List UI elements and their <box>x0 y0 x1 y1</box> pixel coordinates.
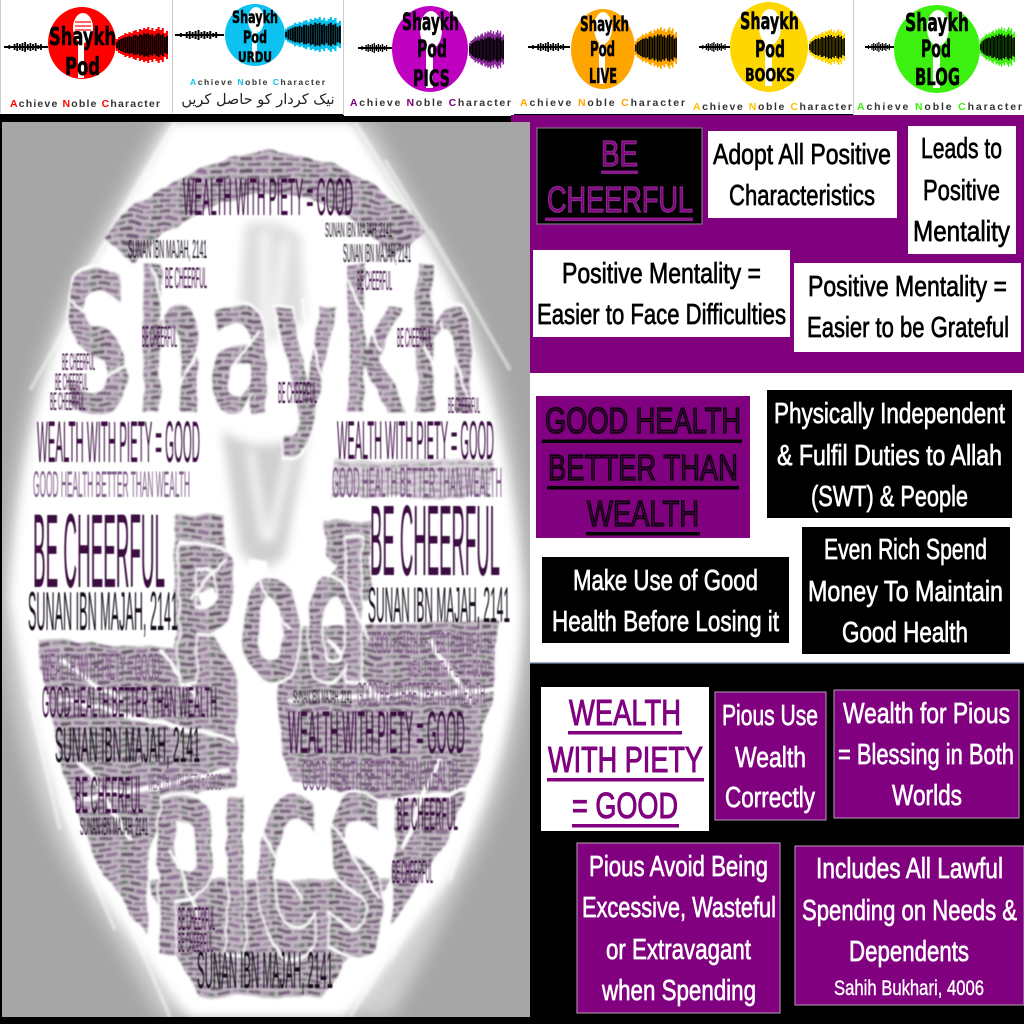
word cloud phrases: GOOD HEALTH BETTER THAN WEALTH <box>42 678 217 727</box>
word cloud phrases: BE CHEERFUL <box>165 262 207 295</box>
word cloud picture panel <box>0 122 530 1017</box>
word cloud phrases: BE CHEERFUL <box>178 927 213 958</box>
text: GOOD HEALTH BETTER THAN WEALTH <box>372 627 492 660</box>
logo: Shaykh Pod Blog <box>857 5 1022 113</box>
word cloud phrases: WEALTH WITH PIETY = GOOD <box>148 769 222 795</box>
panel: be cheerful <box>511 115 1024 373</box>
logo: Shaykh Pod Urdu: Achieve Noble Character <box>190 77 326 87</box>
logo: Shaykh Pod Live: LIVE <box>589 64 617 88</box>
word cloud phrases <box>28 168 510 1000</box>
box: make use of good health: Health Before Losing it <box>552 606 779 638</box>
box: even rich spend money <box>802 527 1010 654</box>
box: pious avoid being excessive: Excessive, Wasteful <box>582 892 776 924</box>
heading: wealth with piety = good: WEALTH <box>569 692 681 733</box>
citation: Sahih Bukhari, 4006 <box>834 977 984 1000</box>
logo: Shaykh Pod Blog: Shaykh <box>905 8 969 37</box>
logo: Shaykh Pod Books: Shaykh <box>740 9 799 35</box>
heading: be cheerful <box>537 128 702 224</box>
box: includes all lawful spending <box>795 846 1024 1005</box>
word cloud phrases: BE CHEERFUL <box>55 369 88 396</box>
logo: Shaykh Pod Books: BOOKS <box>745 65 795 86</box>
box: pious use wealth correctly: Correctly <box>725 782 815 814</box>
word cloud phrases: SUNAN IBN MAJAH, 2141 <box>343 238 411 268</box>
text: WEALTH WITH PIETY = GOOD <box>408 656 490 683</box>
word cloud phrases: BE CHEERFUL <box>278 375 317 410</box>
box: adopt all positive characteristics <box>708 131 897 218</box>
logo: Shaykh Pod Urdu: نیک کردار کو حاصل کریں <box>181 92 335 108</box>
logo lettering: Shaykh Pod Pics mosaic: Pod <box>170 506 370 727</box>
word cloud phrases: WEALTH WITH PIETY = GOOD <box>42 647 160 689</box>
text: WEALTH WITH PIETY = GOOD <box>183 168 353 227</box>
logo: Shaykh Pod Books: Pod <box>755 37 785 63</box>
word cloud phrases: BE CHEERFUL <box>178 901 215 937</box>
box: pious avoid being excessive: or Extravagant <box>606 934 751 966</box>
logo: Shaykh Pod Live: Pod <box>590 37 615 61</box>
box: pious use wealth correctly: Wealth <box>735 742 806 774</box>
box: easier to face difficulties: Positive Mentality = <box>562 258 761 290</box>
heading: wealth with piety = good: = GOOD <box>572 785 678 826</box>
box: leads to positive mentality <box>908 126 1016 254</box>
box: leads to positive mentality: Positive <box>923 175 1000 207</box>
logo: Shaykh Pod Urdu: Pod <box>243 28 267 48</box>
box: physically independent: (SWT) & People <box>811 481 968 513</box>
logo: Shaykh Pod Pics: PICS <box>413 67 450 92</box>
box: make use of good health <box>542 557 789 643</box>
logo: Shaykh Pod Urdu <box>175 4 340 108</box>
box: make use of good health: Make Use of Good <box>573 565 758 597</box>
logo: Shaykh Pod: Achieve Noble Character <box>10 98 160 110</box>
box: easier to be grateful <box>794 263 1021 352</box>
box: physically independent <box>767 390 1012 518</box>
word cloud phrases: SUNAN IBN MAJAH, 2141 <box>325 219 392 242</box>
logo: Shaykh Pod Blog: BLOG <box>915 65 960 91</box>
logo: Shaykh Pod Blog: Pod <box>921 35 951 63</box>
logo: Shaykh Pod Pics <box>350 6 511 109</box>
word cloud phrases: WEALTH WITH PIETY = GOOD <box>37 410 200 475</box>
text: BE CHEERFUL <box>397 788 458 840</box>
box: easier to face difficulties: Easier to Face Difficulties <box>537 299 786 331</box>
logo: Shaykh Pod Pics: Pod <box>417 35 447 63</box>
heading: be cheerful: CHEERFUL <box>547 179 693 220</box>
word cloud phrases: BE CHEERFUL <box>397 322 432 353</box>
heading: good health better than wealth: WEALTH <box>587 493 699 534</box>
logo: Shaykh Pod: Shaykh <box>49 22 116 51</box>
word cloud picture panel: BE CHEERFUL <box>448 393 480 418</box>
mic silhouette wisps <box>222 222 308 566</box>
word cloud phrases: SUNAN IBN MAJAH, 2141 <box>128 234 207 264</box>
box: wealth for pious <box>834 690 1019 818</box>
logo: Shaykh Pod Live: Achieve Noble Character <box>520 97 685 109</box>
heading: wealth with piety = good <box>541 687 709 831</box>
text: GOOD HEALTH BETTER THAN WEALTH <box>357 676 485 712</box>
logo lettering: Shaykh Pod Pics mosaic <box>40 172 500 1007</box>
logo: Shaykh Pod Blog: Achieve Noble Character <box>857 101 1022 113</box>
logo: Shaykh Pod Live: Shaykh <box>580 12 629 36</box>
box: wealth for pious: Worlds <box>892 780 962 812</box>
logo: Shaykh Pod Pics: Shaykh <box>402 8 459 36</box>
logo: Shaykh Pod Live <box>520 9 685 109</box>
logo: Shaykh Pod Books: Achieve Noble Character <box>693 101 852 113</box>
word cloud phrases: BE CHEERFUL <box>62 349 95 376</box>
big word: Shaykh: Shaykh <box>60 230 480 463</box>
box: pious avoid being excessive: Pious Avoid Being <box>589 851 768 883</box>
box: adopt all positive characteristics: Characteristics <box>729 180 875 212</box>
word cloud phrases: BE CHEERFUL <box>33 493 165 610</box>
box: pious use wealth correctly <box>715 692 826 820</box>
word cloud phrases: GOOD HEALTH BETTER THAN WEALTH <box>33 464 190 505</box>
logo: Shaykh Pod: Pod <box>65 52 100 81</box>
panel: wealth with piety <box>530 664 1024 1024</box>
box: pious avoid being excessive: when Spending <box>601 975 756 1007</box>
logo: Shaykh Pod Urdu: Shaykh <box>232 8 278 28</box>
logo lettering: Shaykh Pod Pics mosaic: PICS <box>150 751 390 1007</box>
heading: wealth with piety = good: WITH PIETY <box>548 739 703 780</box>
word cloud phrases: BE CHEERFUL <box>142 321 177 354</box>
word cloud phrases: BE CHEERFUL <box>357 265 392 296</box>
heading: good health better than wealth: GOOD HEALTH <box>545 400 741 441</box>
logo: Shaykh Pod Books <box>693 2 852 113</box>
word cloud phrases: BE CHEERFUL <box>75 767 143 825</box>
word cloud phrases: SUNAN IBN MAJAH, 2141 <box>80 813 148 841</box>
word cloud phrases: SUNAN IBN MAJAH, 2141 <box>197 942 333 1000</box>
box: easier to face difficulties <box>533 250 790 337</box>
panel: good health <box>530 373 1024 664</box>
word cloud phrases: BE CHEERFUL <box>392 854 433 890</box>
box: pious use wealth correctly: Pious Use <box>722 700 818 732</box>
box: even rich spend money: Good Health <box>842 617 968 649</box>
box: pious avoid being excessive <box>577 843 780 1013</box>
heading: good health better than wealth: BETTER THAN <box>548 447 738 488</box>
logo: Shaykh Pod Urdu: URDU <box>238 50 272 66</box>
logo: Shaykh Pod Pics: Achieve Noble Character <box>350 97 511 109</box>
logo: Shaykh Pod <box>4 7 167 110</box>
word cloud phrases: SUNAN IBN MAJAH, 2141 <box>55 717 200 773</box>
text: SUNAN IBN MAJAH, 2141 <box>368 577 510 633</box>
header strip: Shaykh Pod logos <box>0 0 1024 116</box>
heading: be cheerful: BE <box>601 133 638 174</box>
word cloud phrases: SUNAN IBN MAJAH, 2141 <box>293 687 352 707</box>
box: includes all lawful spending: Dependents <box>849 936 969 968</box>
box: adopt all positive characteristics: Adopt All Positive <box>713 139 891 171</box>
heading: good health better than wealth <box>536 396 750 538</box>
word cloud phrases: BE CHEERFUL <box>50 388 85 416</box>
word cloud phrases: SUNAN IBN MAJAH, 2141 <box>28 580 178 642</box>
